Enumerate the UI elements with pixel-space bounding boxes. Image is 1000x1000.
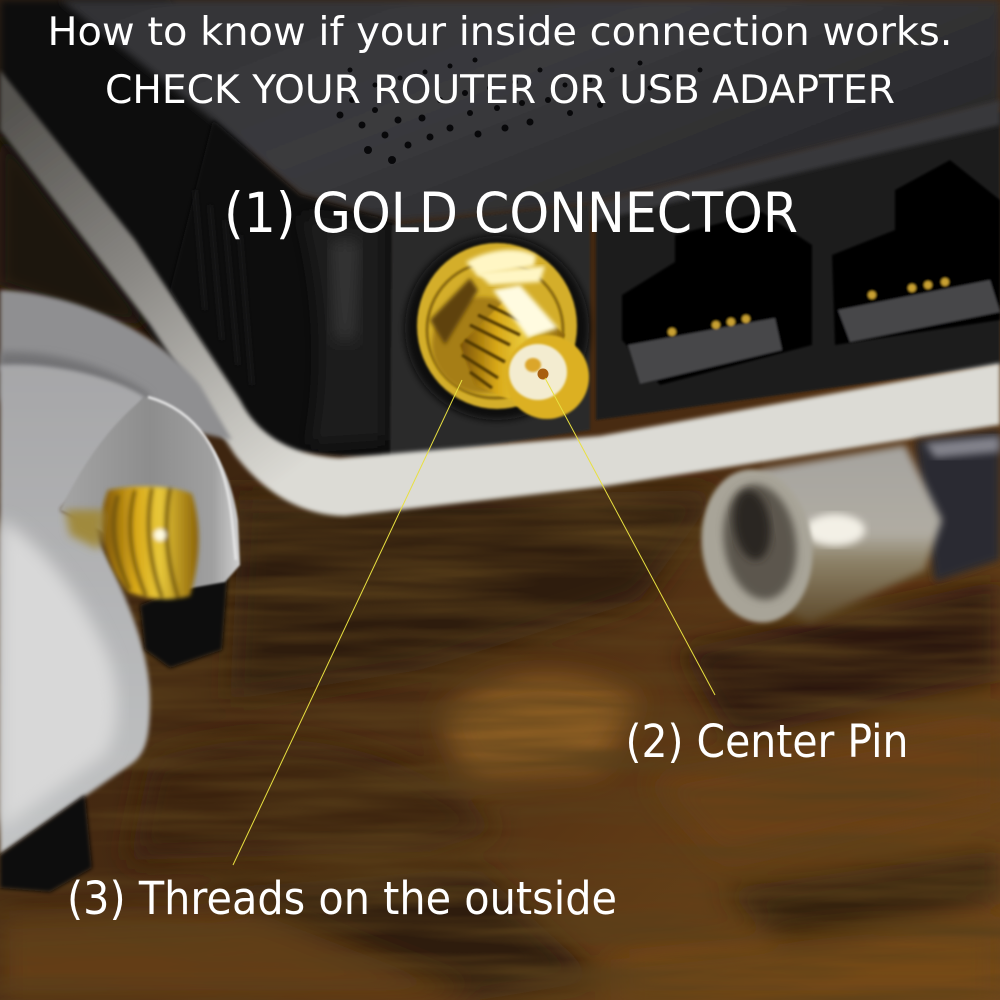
router front face bbox=[170, 100, 1000, 460]
dark background behind band bbox=[0, 0, 300, 460]
leader line: threads bbox=[233, 380, 462, 865]
center pin bbox=[538, 368, 548, 380]
hole bbox=[716, 480, 804, 604]
ventilation dots bbox=[336, 58, 702, 164]
ring bbox=[692, 462, 822, 630]
hex nut body bbox=[760, 445, 942, 622]
label: center pin: (2) Center Pin bbox=[626, 715, 908, 768]
left antenna silver body bbox=[0, 290, 240, 892]
gold connector bbox=[405, 236, 589, 420]
black cable bbox=[915, 430, 1000, 582]
black foot upper bbox=[140, 570, 228, 668]
dark brown area left of band bbox=[0, 130, 150, 325]
label: gold connector: (1) GOLD CONNECTOR bbox=[224, 181, 798, 245]
ethernet port right bbox=[832, 160, 1000, 345]
highlight bbox=[805, 514, 865, 546]
ribs bbox=[195, 190, 252, 385]
wood grain bbox=[0, 480, 1000, 1000]
connector mouth bbox=[505, 335, 589, 419]
label: threads: (3) Threads on the outside bbox=[67, 872, 617, 925]
silver coax connector bbox=[692, 430, 1000, 630]
bright highlights on nut bbox=[466, 250, 536, 276]
title: How to know if your inside connection works. bbox=[48, 10, 952, 55]
router white base band bbox=[0, 70, 1000, 516]
flange bbox=[417, 243, 577, 409]
recess around connector bbox=[405, 236, 589, 420]
router top surface bbox=[60, 0, 1000, 222]
dark facet bbox=[430, 278, 478, 345]
bright lower body bbox=[0, 520, 117, 830]
barrel highlight bbox=[493, 285, 558, 338]
silver wedge bbox=[60, 397, 240, 590]
threaded barrel bbox=[460, 290, 565, 400]
left gold connector bbox=[65, 487, 199, 599]
black foot lower bbox=[0, 795, 92, 892]
title: CHECK YOUR ROUTER OR USB ADAPTER bbox=[105, 68, 895, 113]
leader line: center pin bbox=[545, 378, 715, 695]
ethernet port left bbox=[622, 212, 812, 385]
title bbox=[48, 10, 952, 113]
